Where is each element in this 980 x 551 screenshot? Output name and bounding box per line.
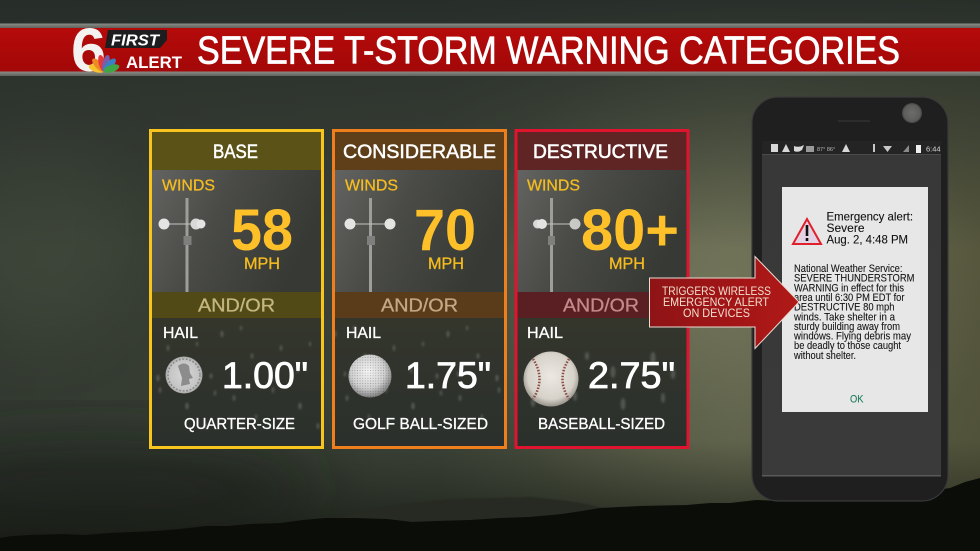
header: destructive	[517, 131, 688, 170]
alert heading: Severe	[826, 221, 865, 235]
and/or band: base: AND/OR	[198, 296, 275, 316]
panel: considerable	[334, 130, 506, 448]
panel: destructive	[516, 130, 688, 448]
phone speaker	[838, 120, 870, 122]
phone camera	[902, 103, 922, 123]
hail section: base: QUARTER-SIZE	[184, 416, 295, 433]
logo: channel 6 first alert: FIRST	[111, 32, 161, 50]
winds section: base: WINDS	[162, 178, 215, 194]
logo: channel 6 first alert: 6	[71, 16, 106, 84]
icon: anemometer	[158, 198, 206, 292]
alert message: area until 6:30 PM EDT for	[794, 292, 905, 304]
icon: anemometer	[533, 198, 580, 292]
phone status bar: 87° 86°	[817, 147, 835, 153]
alert message: sturdy building away from	[794, 321, 900, 333]
panel: base	[150, 130, 322, 448]
hail section: base: HAIL	[163, 325, 198, 342]
winds section: destructive: WINDS	[527, 178, 580, 194]
winds section: destructive: MPH	[609, 255, 645, 273]
alert message	[793, 263, 914, 362]
and/or band: destructive	[517, 292, 688, 318]
hail section: considerable	[334, 318, 505, 446]
background: foreground hill silhouette	[0, 478, 980, 551]
and/or band: base	[151, 292, 322, 318]
and/or band: considerable	[334, 292, 505, 318]
winds section: base: 58	[231, 198, 293, 263]
winds section: considerable: WINDS	[345, 178, 398, 194]
arrow: triggers wireless emergency alert: EMERGENCY ALERT	[663, 296, 769, 309]
header: destructive: DESTRUCTIVE	[533, 142, 668, 163]
header: base	[151, 131, 322, 170]
arrow: triggers wireless emergency alert	[650, 256, 799, 348]
alert message: WARNING in effect for this	[794, 282, 904, 294]
icon: quarter coin	[166, 356, 202, 394]
hail section: destructive	[517, 318, 688, 446]
icon: baseball	[524, 352, 578, 406]
winds section: destructive	[517, 170, 688, 292]
background: distant hill	[340, 497, 640, 530]
hail section: considerable: 1.75"	[405, 355, 491, 396]
hail section: destructive: 2.75"	[588, 355, 675, 396]
winds section: base	[151, 170, 322, 292]
phone	[752, 97, 948, 501]
logo: channel 6 first alert: ALERT	[126, 53, 183, 72]
winds section: base: MPH	[244, 255, 280, 273]
phone screen	[762, 155, 941, 476]
arrow: triggers wireless emergency alert: ON DEVICES	[683, 307, 750, 320]
icon: golf ball	[348, 354, 392, 398]
winds section: considerable: 70	[414, 198, 476, 263]
alert message: be deadly to those caught	[794, 340, 901, 352]
hail section: destructive: BASEBALL-SIZED	[538, 416, 665, 433]
alert heading: Aug. 2, 4:48 PM	[826, 232, 908, 246]
alert heading: Emergency alert:	[826, 210, 913, 224]
hail section: considerable: GOLF BALL-SIZED	[353, 416, 488, 433]
alert message: windows. Flying debris may	[793, 331, 911, 343]
and/or band: destructive: AND/OR	[563, 296, 639, 316]
header: considerable: CONSIDERABLE	[343, 142, 496, 163]
winds section: destructive: 80+	[581, 198, 679, 263]
phone status bar	[762, 141, 941, 155]
hail section: base	[151, 318, 322, 446]
alert message: National Weather Service:	[794, 263, 902, 275]
alert message: DESTRUCTIVE 80 mph	[794, 302, 894, 314]
hail section: considerable: HAIL	[346, 325, 381, 342]
header: base: BASE	[213, 142, 258, 163]
alert message: SEVERE THUNDERSTORM	[794, 273, 914, 285]
alert message: winds. Take shelter in a	[793, 311, 896, 323]
icon: warning triangle	[793, 219, 821, 244]
title: SEVERE T-STORM WARNING CATEGORIES	[197, 30, 900, 72]
logo: channel 6 first alert	[73, 28, 182, 73]
icon: anemometer	[344, 198, 396, 292]
title banner	[0, 24, 980, 76]
header: considerable	[334, 131, 505, 170]
winds section: considerable: MPH	[428, 255, 464, 273]
hail section: base: 1.00"	[222, 355, 308, 396]
hail section: destructive: HAIL	[527, 325, 563, 342]
emergency alert dialog	[782, 187, 928, 412]
arrow: triggers wireless emergency alert: TRIGGERS WIRELESS	[662, 285, 771, 298]
winds section: considerable	[334, 170, 505, 292]
and/or band: considerable: AND/OR	[381, 296, 458, 316]
alert message: without shelter.	[793, 350, 856, 362]
alert heading	[826, 210, 913, 246]
ok button: OK	[850, 394, 864, 406]
phone status bar: 6:44	[926, 144, 941, 154]
